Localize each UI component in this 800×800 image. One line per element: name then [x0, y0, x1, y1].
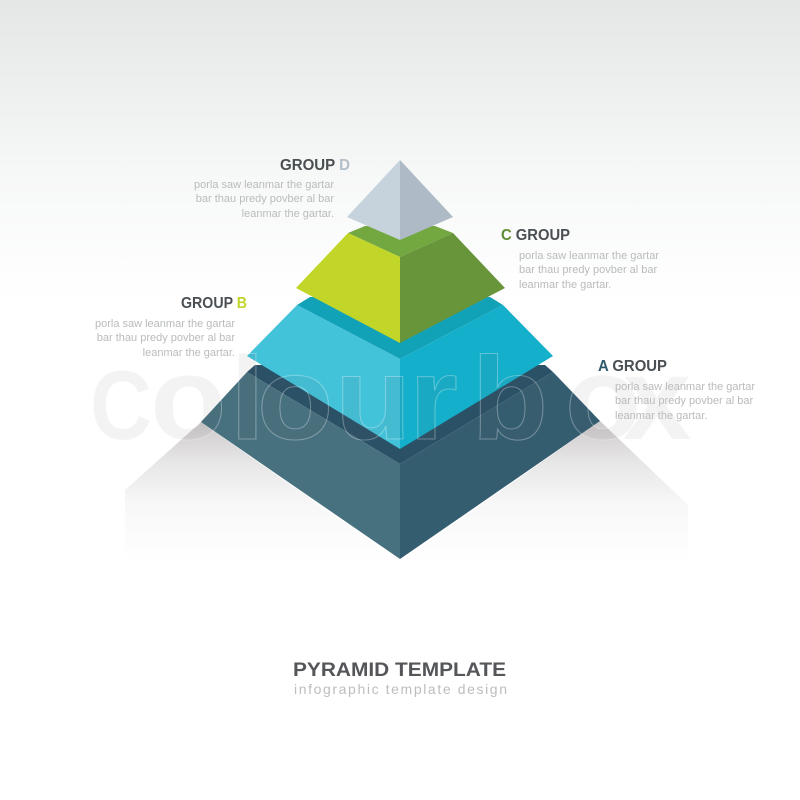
- group D label: [194, 157, 350, 220]
- group C label: [501, 227, 659, 291]
- layer B: [247, 297, 553, 449]
- floor shadow: [125, 421, 688, 562]
- layer D: [347, 160, 453, 240]
- group C text: bar thau predy povber al bar: [519, 264, 658, 276]
- group B text: porla saw leanmar the gartar: [95, 318, 235, 330]
- group D text: leanmar the gartar.: [242, 208, 334, 220]
- group D heading: GROUP D: [280, 157, 350, 174]
- group A text: leanmar the gartar.: [615, 410, 707, 422]
- group C text: porla saw leanmar the gartar: [519, 250, 659, 262]
- watermark: C: [90, 350, 152, 460]
- layer C: [296, 226, 505, 343]
- group B heading: GROUP B: [181, 295, 247, 312]
- pyramid: [201, 160, 600, 559]
- group B label: [95, 295, 247, 359]
- group D text: porla saw leanmar the gartar: [194, 179, 334, 191]
- group A label: [598, 358, 755, 422]
- group B text: leanmar the gartar.: [143, 347, 235, 359]
- watermark: olourbox: [150, 332, 692, 464]
- layer A: [201, 365, 600, 559]
- group A heading: A GROUP: [598, 358, 667, 375]
- group A text: bar thau predy povber al bar: [615, 395, 754, 407]
- title: PYRAMID TEMPLATE: [293, 660, 506, 681]
- group D text: bar thau predy povber al bar: [196, 193, 334, 205]
- group A text: porla saw leanmar the gartar: [615, 381, 755, 393]
- group C text: leanmar the gartar.: [519, 279, 611, 291]
- subtitle: infographic template design: [294, 681, 507, 697]
- group C heading: C GROUP: [501, 227, 570, 244]
- group B text: bar thau predy povber al bar: [97, 332, 235, 344]
